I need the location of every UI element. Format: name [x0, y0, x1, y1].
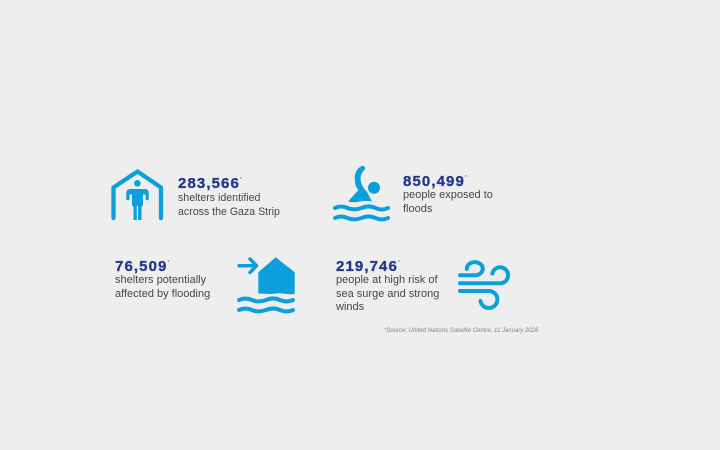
icon: arrow into flooded house	[239, 257, 295, 312]
stat: shelters identified: 283,566*	[178, 175, 242, 192]
stat: shelters affected by flooding: affected by flooding	[115, 288, 210, 300]
source note: *Source: United Nations Satellite Centre, 11 January 2026	[384, 328, 538, 334]
stat: people at risk of sea surge	[336, 258, 439, 313]
stat: shelters identified: across the Gaza Strip	[178, 206, 280, 218]
icon: wind	[460, 262, 508, 308]
stat: people exposed to floods: people exposed to	[403, 189, 493, 201]
stat: people at risk of sea surge: people at high risk of	[336, 274, 438, 286]
stat: shelters identified	[178, 175, 280, 218]
stat: people at risk of sea surge: sea surge and strong	[336, 288, 439, 300]
stat: people at risk of sea surge: winds	[336, 301, 364, 313]
stat: people at risk of sea surge: 219,746*	[336, 258, 400, 274]
stat: people exposed to floods: 850,499*	[403, 172, 467, 190]
stat: people exposed to floods	[403, 172, 493, 215]
stat: shelters affected by flooding: shelters potentially	[115, 274, 206, 286]
icon: swimmer in waves	[335, 166, 388, 220]
stat: people exposed to floods: floods	[403, 203, 432, 215]
stat: shelters affected by flooding	[115, 258, 210, 300]
icon: shelter with person	[114, 172, 161, 220]
stat: shelters affected by flooding: 76,509*	[115, 258, 169, 274]
stat: shelters identified: shelters identified	[178, 192, 260, 204]
